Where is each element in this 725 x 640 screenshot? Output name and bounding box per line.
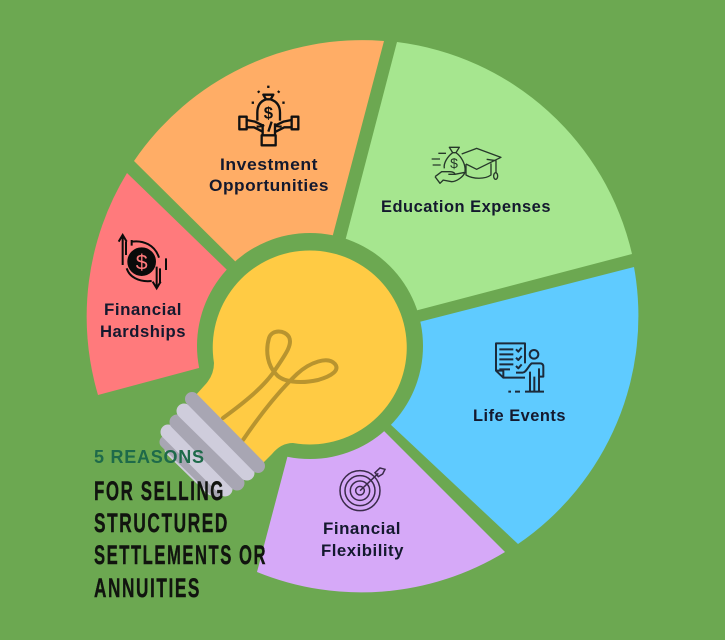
icon: person presenting checklist [496, 343, 544, 392]
screw base [166, 399, 258, 491]
label: education expenses: Education Expenses [381, 198, 551, 216]
bulb glass [195, 250, 407, 464]
label: life events: Life Events [473, 407, 566, 425]
filament [223, 332, 336, 440]
segment: education expenses [335, 42, 632, 320]
subtitle: 5 REASONS [94, 447, 204, 467]
segment: financial flexibility [257, 412, 505, 592]
label: financial flexibility: Financial [323, 520, 401, 538]
icon: money bag in hands: $ [264, 103, 274, 122]
icon: dollar circle with arrows [119, 235, 166, 288]
title: STRUCTURED [94, 508, 229, 538]
title: FOR SELLING [94, 476, 225, 506]
icon: target with arrow [340, 468, 385, 511]
icon: money bag in hands [239, 86, 298, 145]
segment: investment opportunities [134, 40, 384, 348]
icon: money bag and graduation cap: $ [450, 155, 458, 171]
label: financial hardships: Financial [104, 301, 182, 319]
segment: life events [350, 267, 638, 544]
title: SETTLEMENTS OR [94, 540, 267, 570]
label: financial flexibility: Flexibility [321, 542, 404, 560]
icon: dollar circle with arrows: $ [136, 250, 148, 274]
icon: money bag and graduation cap [432, 147, 501, 183]
light bulb [166, 250, 407, 491]
label: investment opportunities: Investment [220, 156, 318, 174]
label: financial hardships: Hardships [100, 323, 186, 341]
segment: financial hardships [87, 173, 255, 395]
title: ANNUITIES [94, 573, 201, 603]
ring around bulb [197, 233, 423, 459]
label: investment opportunities: Opportunities [209, 177, 329, 195]
